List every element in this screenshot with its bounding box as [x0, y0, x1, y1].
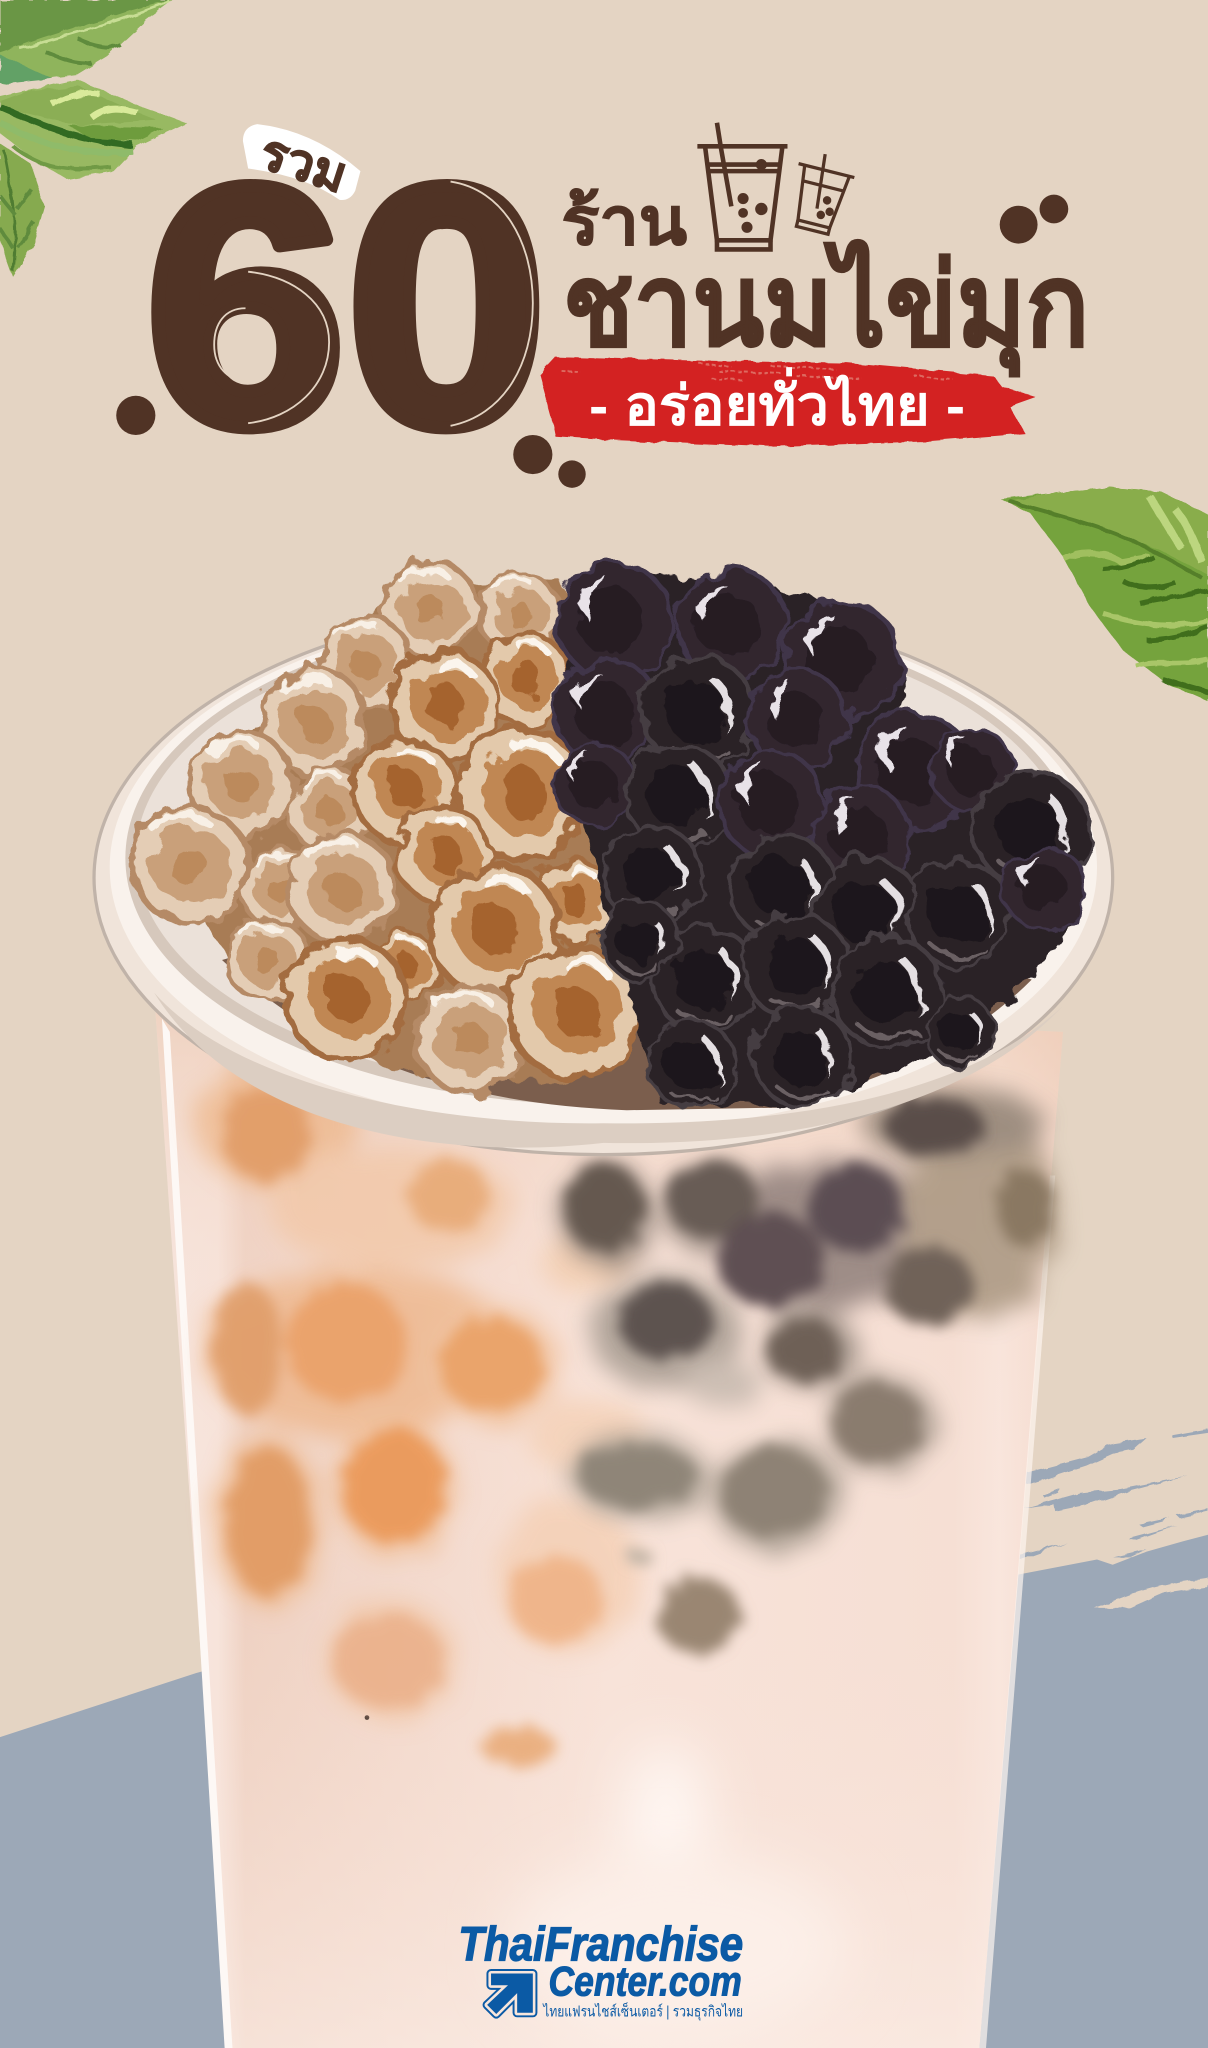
leaf 2 [0, 80, 187, 179]
logo domain: Center.com [548, 1958, 742, 2005]
logo tagline: ไทยแฟรนไชส์เซ็นเตอร์ | รวมธุรกิจไทย [542, 2002, 743, 2022]
black speck [365, 1715, 369, 1720]
banner text: - อร่อยทั่วไทย - [589, 366, 965, 436]
grey pearl cores in tea [565, 1097, 1054, 1654]
decorative pearl dots [116, 195, 1068, 488]
brush strokes on band [1016, 1429, 1208, 1608]
icon: small cup [784, 148, 858, 237]
blue-grey diagonal band [0, 1535, 1208, 2048]
dark tapioca pearls [553, 563, 1089, 1108]
leaves: top left [0, 0, 187, 277]
title number 60 [145, 114, 547, 497]
orange pearl halos in tea [193, 1061, 646, 1719]
leaf 1 [0, 0, 172, 84]
digits 60: 60 [145, 114, 547, 497]
red brush banner [539, 357, 1036, 447]
cup body [154, 993, 1063, 2048]
heading: ร้าน: ร้าน [562, 185, 687, 258]
leaf 3 [0, 144, 44, 277]
logo wordmark: ThaiFranchise [458, 1917, 743, 1971]
badge: รวม: รวม [254, 123, 354, 203]
heading: ชานมไข่มุก: ชานมไข่มุก [563, 240, 1089, 377]
leaf: top right [1000, 487, 1208, 701]
cup rim [94, 601, 1113, 1155]
tan tapioca pearls [132, 562, 640, 1092]
icon: large cup [697, 123, 787, 249]
outline echoes [214, 182, 533, 426]
orange pearl cores in tea [214, 1087, 603, 1766]
grey pearl halos in tea [560, 1087, 1058, 1550]
icon: logo arrow [487, 1974, 533, 2014]
logo: ThaiFranchiseCenter [458, 1917, 743, 2022]
